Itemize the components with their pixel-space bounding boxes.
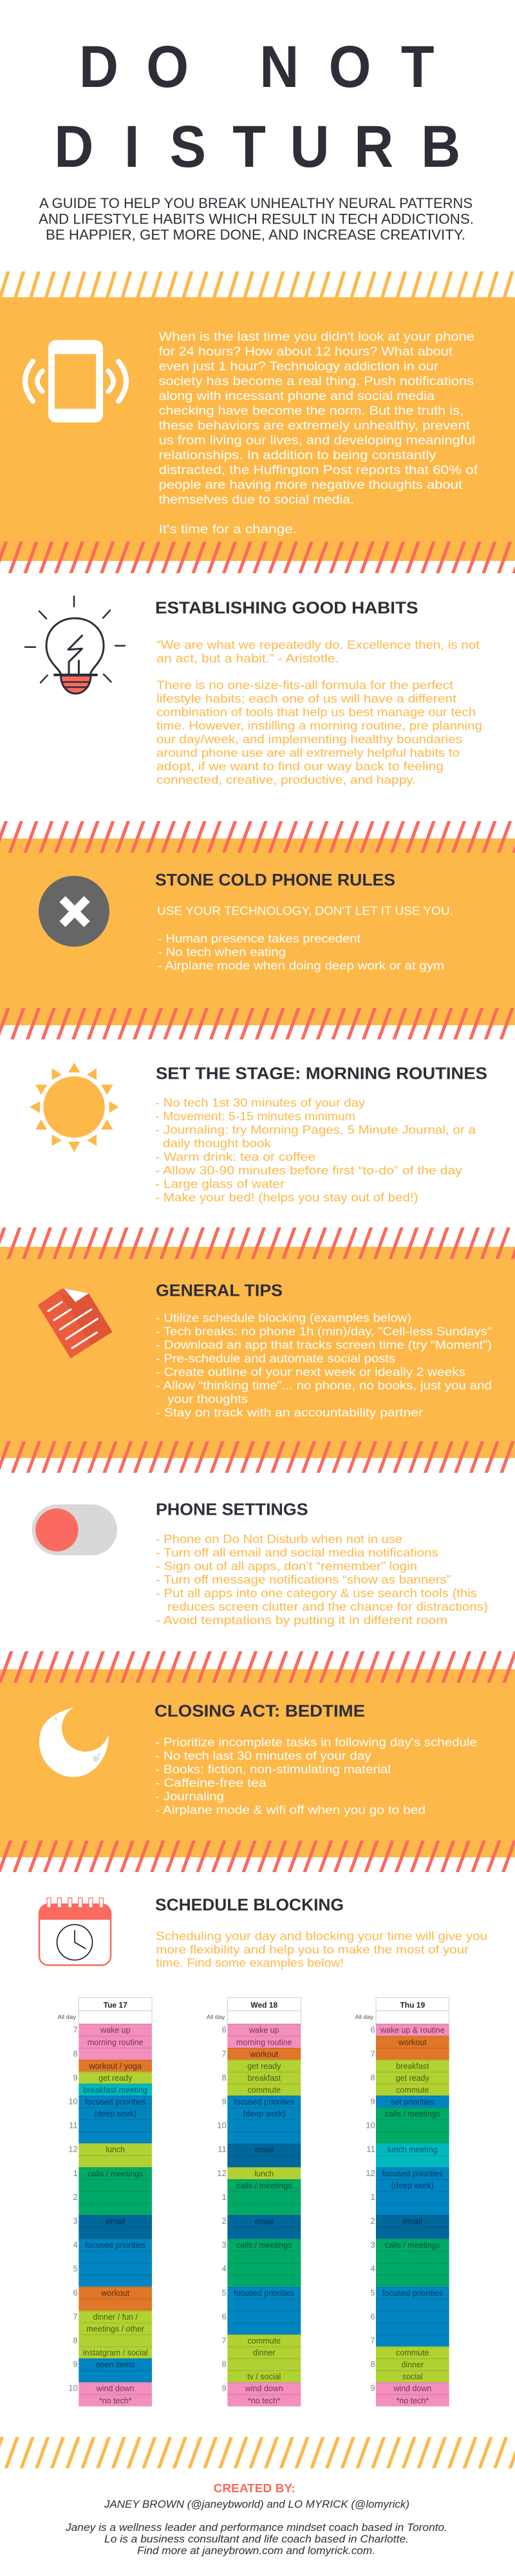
chart: Tuesday schedule: workout / yoga (89, 2061, 142, 2070)
chart: Thursday schedule: lunch meeting (388, 2145, 438, 2154)
chart: Tuesday schedule: 11 (69, 2121, 78, 2130)
bedtime list: - Caffeine-free tea (155, 1777, 267, 1790)
chart: Thursday schedule: 9 (370, 2383, 375, 2393)
chart: Tuesday schedule: 1 (73, 2168, 78, 2178)
chart: Thursday schedule: 7 (370, 2049, 375, 2058)
chart: Tuesday schedule: wake up (100, 2026, 131, 2035)
schedule intro text: time. Find some examples below! (156, 1956, 344, 1969)
panel: introduction (0, 287, 515, 561)
icon: x in circle (39, 876, 109, 947)
chart: Tuesday schedule: focused priorities (85, 2098, 145, 2107)
quote and paragraph: an act, but a habit.” - Aristotle. (156, 652, 339, 665)
morning list: - No tech 1st 30 minutes of your day (155, 1096, 365, 1109)
morning list: - Journaling: try Morning Pages, 5 Minute Journal, or a (155, 1123, 476, 1136)
chart: Thursday schedule: 2 (370, 2216, 375, 2226)
tips list: - Stay on track with an accountability partner (156, 1406, 423, 1419)
chart: Thursday schedule: 1 (370, 2192, 375, 2202)
chart: Wednesday schedule: breakfast (248, 2074, 281, 2083)
bedtime list: - Books: fiction, non-stimulating material (155, 1763, 391, 1776)
settings list: reduces screen clutter and the chance for distractions) (167, 1600, 488, 1613)
panel: closing act bedtime (0, 1667, 515, 1857)
bedtime list: - Journaling (155, 1790, 224, 1803)
rules list: USE YOUR TECHNOLOGY, DON'T LET IT USE YOU. (157, 905, 453, 918)
chart: Tuesday schedule: wind down (96, 2384, 135, 2393)
bedtime list: - No tech last 30 minutes of your day (155, 1750, 371, 1763)
chart: Thursday schedule: set priorities (391, 2098, 434, 2107)
chart: Wednesday schedule: 12 (217, 2168, 227, 2178)
bedtime list: - Airplane mode & wifi off when you go to bed (155, 1804, 426, 1817)
chart: Thursday schedule: 8 (370, 2360, 375, 2369)
rules list: - Airplane mode when doing deep work or at gym (158, 959, 444, 972)
icon: sun (30, 1063, 119, 1152)
tips list: - Utilize schedule blocking (examples below) (156, 1311, 411, 1324)
chart: Tuesday schedule: 2 (73, 2192, 78, 2202)
chart: Tuesday schedule: 12 (68, 2145, 78, 2154)
chart: Wednesday schedule: email (254, 2217, 274, 2226)
intro text: for 24 hours? How about 12 hours? What about (158, 345, 453, 359)
author bios: Lo is a business consultant and life coach based in Charlotte. (104, 2533, 409, 2545)
chart: Tuesday schedule: breakfast meeting (84, 2085, 147, 2094)
heading: PHONE SETTINGS (156, 1500, 308, 1519)
intro text: people are having more negative thoughts about (158, 478, 463, 492)
heading: SET THE STAGE: MORNING ROUTINES (156, 1063, 487, 1083)
quote and paragraph: lifestyle habits; each one of us will have a different (156, 692, 456, 705)
chart: Thursday schedule: 11 (366, 2145, 375, 2154)
chart: Tuesday schedule: 10 (68, 2383, 78, 2393)
chart: Tuesday schedule: 10 (68, 2097, 78, 2106)
intro text: relationships. In addition to being constantly (158, 448, 436, 462)
chart: Wednesday schedule: Wed 18 (250, 2000, 278, 2009)
chart: Tuesday schedule: open items (96, 2360, 135, 2369)
icon: moon (39, 1707, 109, 1777)
chart: Wednesday schedule: 7 (221, 2335, 227, 2345)
tips list: your thoughts (167, 1392, 248, 1405)
tips list: - Tech breaks: no phone 1h (min)/day, "Cell-less Sundays" (156, 1325, 492, 1338)
chart: Wednesday schedule: tv / social (247, 2372, 281, 2382)
rules list: - Human presence takes precedent (158, 932, 360, 945)
schedule intro text (156, 1929, 487, 1969)
chart: Tuesday schedule: 5 (73, 2264, 78, 2273)
chart: Thursday schedule: Thu 19 (400, 2000, 425, 2009)
chart: Wednesday schedule: focused priorities (234, 2289, 295, 2298)
chart: Wednesday schedule: workout (249, 2050, 279, 2059)
title: DISTURB (54, 113, 460, 180)
chart: Tuesday schedule: calls / meetings (88, 2169, 143, 2178)
intro text: distracted, the Huffington Post reports that 60% of (158, 463, 478, 477)
chart: Wednesday schedule: 2 (221, 2216, 227, 2226)
chart: Wednesday schedule: commute (248, 2085, 281, 2094)
chart: Thursday schedule: breakfast (396, 2061, 429, 2070)
chart: Wednesday schedule: 9 (221, 2097, 227, 2106)
chart: Wednesday schedule: 3 (221, 2240, 227, 2249)
bedtime list (155, 1736, 477, 1817)
chart: Thursday schedule: email (403, 2217, 422, 2226)
chart: Thursday schedule: 10 (366, 2121, 375, 2130)
morning list: - Large glass of water (155, 1177, 285, 1190)
chart: Wednesday schedule: calls / meetings (236, 2241, 292, 2250)
chart: Wednesday schedule: commute (248, 2336, 281, 2345)
subtitle: AND LIFESTYLE HABITS WHICH RESULT IN TECH ADDICTIONS. (39, 211, 474, 227)
chart: Thursday schedule: 5 (370, 2287, 375, 2297)
author bios (65, 2522, 447, 2557)
chart: Tuesday schedule: 9 (73, 2072, 78, 2082)
chart: Wednesday schedule: 10 (217, 2121, 227, 2130)
heading: GENERAL TIPS (156, 1281, 283, 1300)
chart: Wednesday schedule: 6 (221, 2025, 227, 2034)
chart: Thursday schedule: *no tech* (396, 2396, 429, 2405)
chart: Tuesday schedule: lunch (106, 2145, 125, 2154)
quote and paragraph: connected, creative, productive, and happy. (156, 773, 416, 786)
panel: schedule blocking (39, 1895, 487, 2407)
rules list: - No tech when eating (158, 945, 286, 958)
chart: Wednesday schedule: focused priorities (234, 2098, 295, 2107)
morning list (155, 1096, 476, 1204)
icon: toggle switch (32, 1504, 117, 1555)
panel: credits (0, 2452, 515, 2557)
chart: Tuesday schedule: 6 (73, 2287, 78, 2297)
tips list: - Allow “thinking time”... no phone, no books, just you and (156, 1379, 492, 1392)
quote and paragraph: adopt, if we want to find our way back to feeling (156, 760, 444, 773)
chart: Wednesday schedule: 7 (221, 2049, 227, 2058)
chart: Tuesday schedule: 7 (73, 2025, 78, 2034)
chart: Wednesday schedule (207, 1998, 301, 2407)
intro text: checking have become the norm. But the truth is, (158, 404, 464, 418)
chart: Tuesday schedule: *no tech* (99, 2396, 132, 2405)
title (54, 33, 460, 180)
quote and paragraph: time. However, instilling a morning routine, pre planning (156, 719, 482, 732)
chart: Tuesday schedule: meetings / other (86, 2324, 144, 2333)
heading: SCHEDULE BLOCKING (155, 1895, 344, 1915)
tips list: - Pre-schedule and automate social posts (156, 1352, 395, 1365)
chart: Tuesday schedule: dinner / fun / (93, 2313, 138, 2322)
rules list (157, 905, 453, 972)
quote and paragraph: There is no one-size-fits-all formula for the perfect (156, 679, 453, 692)
chart: Thursday schedule: calls / meetings (385, 2241, 440, 2250)
heading: CLOSING ACT: BEDTIME (154, 1701, 365, 1721)
morning list: - Allow 30-90 minutes before first “to-do” of the day (155, 1164, 462, 1177)
settings list: - Turn off all email and social media notifications (156, 1546, 438, 1559)
intro text: themselves due to social media. (158, 493, 354, 507)
chart: Wednesday schedule: 11 (218, 2145, 227, 2154)
chart: Tuesday schedule: focused priorities (85, 2241, 145, 2250)
chart: Wednesday schedule: 1 (221, 2192, 227, 2202)
chart: Thursday schedule: workout (398, 2038, 427, 2047)
chart: Thursday schedule: 9 (370, 2097, 375, 2106)
title: DO NOT (79, 33, 435, 100)
chart: Thursday schedule (355, 1998, 449, 2407)
chart: Thursday schedule: All day (355, 2014, 373, 2021)
subtitle: A GUIDE TO HELP YOU BREAK UNHEALTHY NEURAL PATTERNS (39, 195, 473, 211)
chart: Wednesday schedule: 6 (221, 2311, 227, 2321)
chart: Wednesday schedule: (deep work) (243, 2110, 285, 2119)
chart: Wednesday schedule: morning routine (236, 2038, 292, 2047)
chart: Thursday schedule: commute (396, 2085, 429, 2094)
intro text: society has become a real thing. Push notifications (158, 374, 474, 388)
quote and paragraph (156, 638, 482, 786)
chart: Wednesday schedule: 5 (221, 2287, 227, 2297)
chart: Tuesday schedule: workout (100, 2289, 130, 2298)
chart: Tuesday schedule: get ready (98, 2074, 133, 2083)
chart: Thursday schedule: get ready (396, 2074, 430, 2083)
intro text: these behaviors are extremely unhealthy, prevent (158, 419, 471, 433)
chart: Wednesday schedule: 8 (221, 2072, 227, 2082)
schedule intro text: Scheduling your day and blocking your time will give you (156, 1929, 487, 1942)
chart: Thursday schedule: 4 (370, 2264, 375, 2273)
subtitle (39, 195, 474, 243)
settings list (156, 1533, 488, 1627)
chart: Thursday schedule: 3 (370, 2240, 375, 2249)
authors: JANEY BROWN (@janeybworld) and LO MYRICK (@lomyrick) (104, 2499, 409, 2510)
chart: Thursday schedule: commute (396, 2349, 429, 2358)
chart: Thursday schedule: focused priorities (382, 2289, 443, 2298)
morning list: - Make your bed! (helps you stay out of bed!) (155, 1191, 418, 1204)
quote and paragraph: our day/week, and implementing healthy boundaries (156, 733, 462, 746)
chart: Tuesday schedule: Tue 17 (104, 2000, 127, 2009)
panel: establishing good habits (25, 596, 482, 786)
heading: ESTABLISHING GOOD HABITS (155, 598, 418, 617)
chart: Thursday schedule: social (402, 2372, 423, 2382)
panel: morning routines (30, 1063, 487, 1204)
chart: Wednesday schedule: wind down (245, 2384, 283, 2393)
chart: Tuesday schedule: 9 (73, 2360, 78, 2369)
morning list: daily thought book (163, 1137, 272, 1150)
chart: Tuesday schedule: email (106, 2217, 125, 2226)
tips list: - Create outline of your next week or ideally 2 weeks (156, 1365, 465, 1378)
settings list: - Turn off message notifications “show as banners” (156, 1573, 451, 1586)
chart: Wednesday schedule: All day (207, 2014, 225, 2021)
chart: Tuesday schedule: All day (57, 2014, 76, 2021)
intro text (158, 330, 478, 536)
chart: Thursday schedule: wind down (393, 2384, 431, 2393)
subtitle: BE HAPPIER, GET MORE DONE, AND INCREASE CREATIVITY. (46, 227, 465, 243)
chart: Thursday schedule: 6 (370, 2025, 375, 2034)
bedtime list: - Prioritize incomplete tasks in following day's schedule (155, 1736, 477, 1749)
chart: Wednesday schedule: wake up (248, 2026, 279, 2035)
chart: Tuesday schedule: 3 (73, 2216, 78, 2226)
intro text: It's time for a change. (158, 522, 297, 536)
settings list: - Sign out of all apps, don’t “remember” login (156, 1560, 417, 1573)
icon: vibrating phone (25, 340, 126, 422)
chart: Thursday schedule: (deep work) (391, 2181, 434, 2190)
created by heading: CREATED BY: (214, 2481, 295, 2495)
quote and paragraph: “We are what we repeatedly do. Excellence then, is not (156, 638, 480, 651)
chart: Thursday schedule: dinner (401, 2360, 424, 2369)
chart: Thursday schedule: 12 (366, 2168, 375, 2178)
chart: Tuesday schedule: 8 (73, 2335, 78, 2345)
morning list: - Movement: 5-15 minutes minimum (155, 1110, 355, 1122)
schedule intro text: more flexibility and help you to make the most of your (156, 1943, 469, 1956)
chart: Tuesday schedule: 7 (73, 2311, 78, 2321)
chart: Tuesday schedule: (deep work) (94, 2110, 136, 2119)
intro text: even just 1 hour? Technology addiction in our (158, 359, 439, 374)
morning list: - Warm drink: tea or coffee (155, 1150, 315, 1163)
chart: Wednesday schedule: calls / meetings (236, 2181, 292, 2190)
icon: calendar with clock (39, 1898, 111, 1965)
chart: Tuesday schedule: 4 (73, 2240, 78, 2249)
author bios: Find more at janeybrown.com and lomyrick.com. (137, 2545, 375, 2557)
panel: general tips (0, 1243, 515, 1458)
settings list: - Avoid temptations by putting it in different room (156, 1614, 447, 1627)
quote and paragraph: combination of tools that help us best manage our tech (156, 706, 476, 719)
chart: Wednesday schedule: email (254, 2145, 274, 2154)
settings list: - Phone on Do Not Disturb when not in use (156, 1533, 402, 1546)
author bios: Janey is a wellness leader and performance mindset coach based in Toronto. (65, 2522, 447, 2533)
chart: Wednesday schedule: get ready (247, 2061, 281, 2070)
chart: Wednesday schedule: dinner (253, 2349, 276, 2358)
chart: Wednesday schedule: 8 (221, 2360, 227, 2369)
intro text: us from living our lives, and developing meaningful (158, 433, 475, 448)
chart: Thursday schedule: wake up & routine (380, 2026, 445, 2035)
chart: Thursday schedule: focused priorities (382, 2169, 443, 2178)
icon: light bulb (25, 596, 125, 694)
chart: Tuesday schedule: instatgram / social (83, 2349, 148, 2358)
panel: stone cold phone rules (0, 837, 515, 1025)
chart: Wednesday schedule: 4 (221, 2264, 227, 2273)
quote and paragraph: around phone use are all extremely helpful habits to (156, 746, 460, 759)
chart: Tuesday schedule: morning routine (88, 2038, 144, 2047)
tips list: - Download an app that tracks screen time (try “Moment”) (156, 1338, 492, 1351)
panel: phone settings (32, 1500, 488, 1627)
chart: Thursday schedule: calls / meetings (385, 2110, 440, 2119)
chart: Wednesday schedule: 9 (221, 2383, 227, 2393)
heading: STONE COLD PHONE RULES (155, 870, 395, 889)
chart: Wednesday schedule: lunch (254, 2169, 274, 2178)
intro text: When is the last time you didn't look at your phone (158, 330, 474, 344)
chart: Thursday schedule: 6 (370, 2311, 375, 2321)
chart: Wednesday schedule: *no tech* (248, 2396, 281, 2405)
chart: Thursday schedule: 7 (370, 2335, 375, 2345)
icon: document (38, 1289, 113, 1358)
chart: Thursday schedule: 8 (370, 2072, 375, 2082)
tips list (156, 1311, 492, 1419)
chart: Tuesday schedule (57, 1998, 152, 2407)
intro text: along with incessant phone and social media (158, 389, 435, 403)
chart: Tuesday schedule: 8 (73, 2049, 78, 2058)
settings list: - Put all apps into one category & use search tools (this (156, 1587, 477, 1600)
